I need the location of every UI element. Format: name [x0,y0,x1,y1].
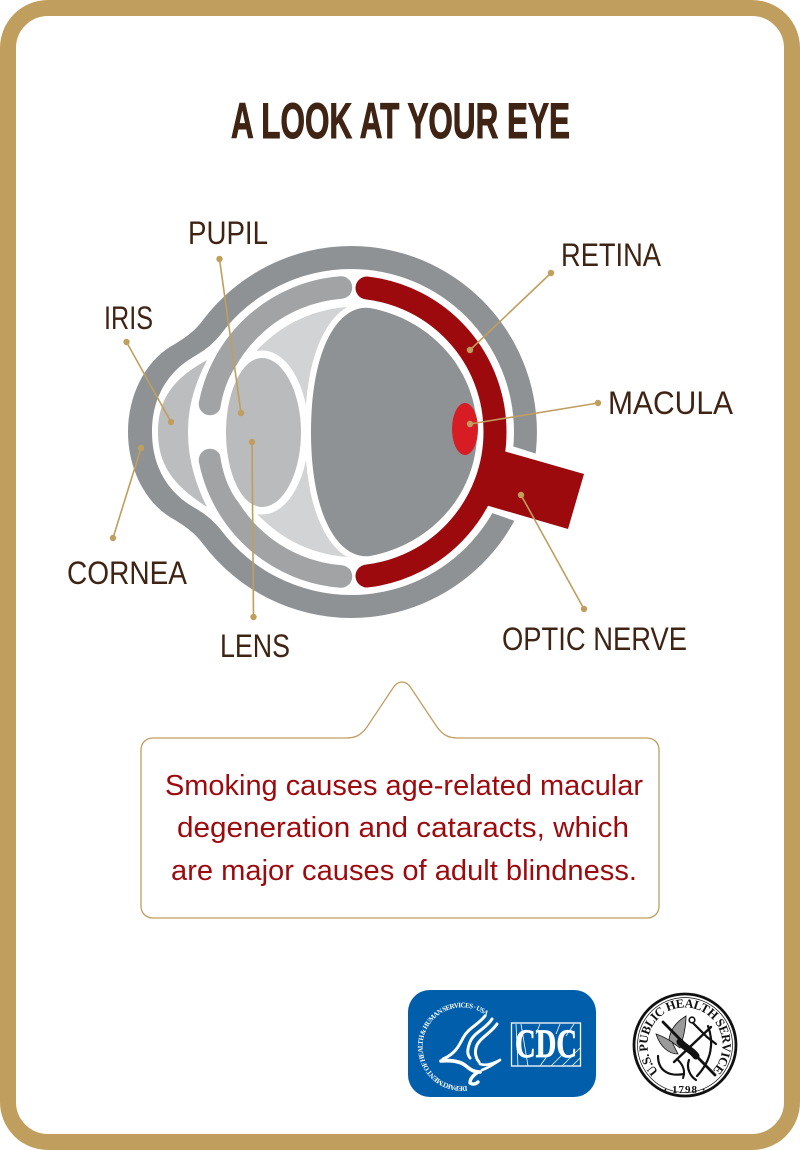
iris: upper and lower bands [210,288,341,576]
HHS eagle [441,1016,500,1084]
sclera: outer gray wall [128,246,537,618]
leader: retina [467,270,554,353]
lens capsule [257,306,354,558]
label: optic nerve: OPTIC NERVE [502,621,687,657]
optic nerve [482,450,584,529]
label: macula: MACULA [608,385,734,421]
label: pupil: PUPIL [188,215,268,251]
label: cornea: CORNEA [67,555,188,591]
seal emblem [656,1016,716,1080]
lens [226,358,301,507]
retina [367,288,495,576]
title: A LOOK AT YOUR EYE [231,93,570,149]
leader lines with dots [110,256,601,620]
callout box: degeneration and cataracts, which [177,812,629,844]
gap in the outer wall around the optic nerve [480,444,600,545]
label: lens: LENS [220,628,290,664]
callout text: Smoking causes age-related macular [165,770,644,802]
logo: Public Health Service seal: · 1798 · [664,1084,706,1096]
cornea chamber [158,360,207,507]
HHS circular text: DEPARTMENT OF HEALTH & HUMAN SERVICES · USA [418,1002,488,1091]
leader: iris [123,339,174,425]
leader: pupil [216,256,244,416]
CDC box: CDC [515,1021,577,1066]
label: retina: RETINA [561,237,662,273]
leader: cornea [110,445,144,541]
logo: HHS and CDC [408,990,596,1097]
leader: macula [467,400,601,427]
macula [452,403,478,455]
vitreous body [311,308,477,556]
label: iris: IRIS [104,300,153,336]
leader: lens [249,439,257,620]
callout box: are major causes of adult blindness. [171,855,637,887]
callout outline [141,682,659,918]
logo: Public Health Service seal [632,992,738,1098]
seal text: U.S. PUBLIC HEALTH SERVICE [639,999,731,1077]
leader: optic nerve [518,492,587,612]
callout box [141,682,659,918]
eye diagram [128,246,600,618]
